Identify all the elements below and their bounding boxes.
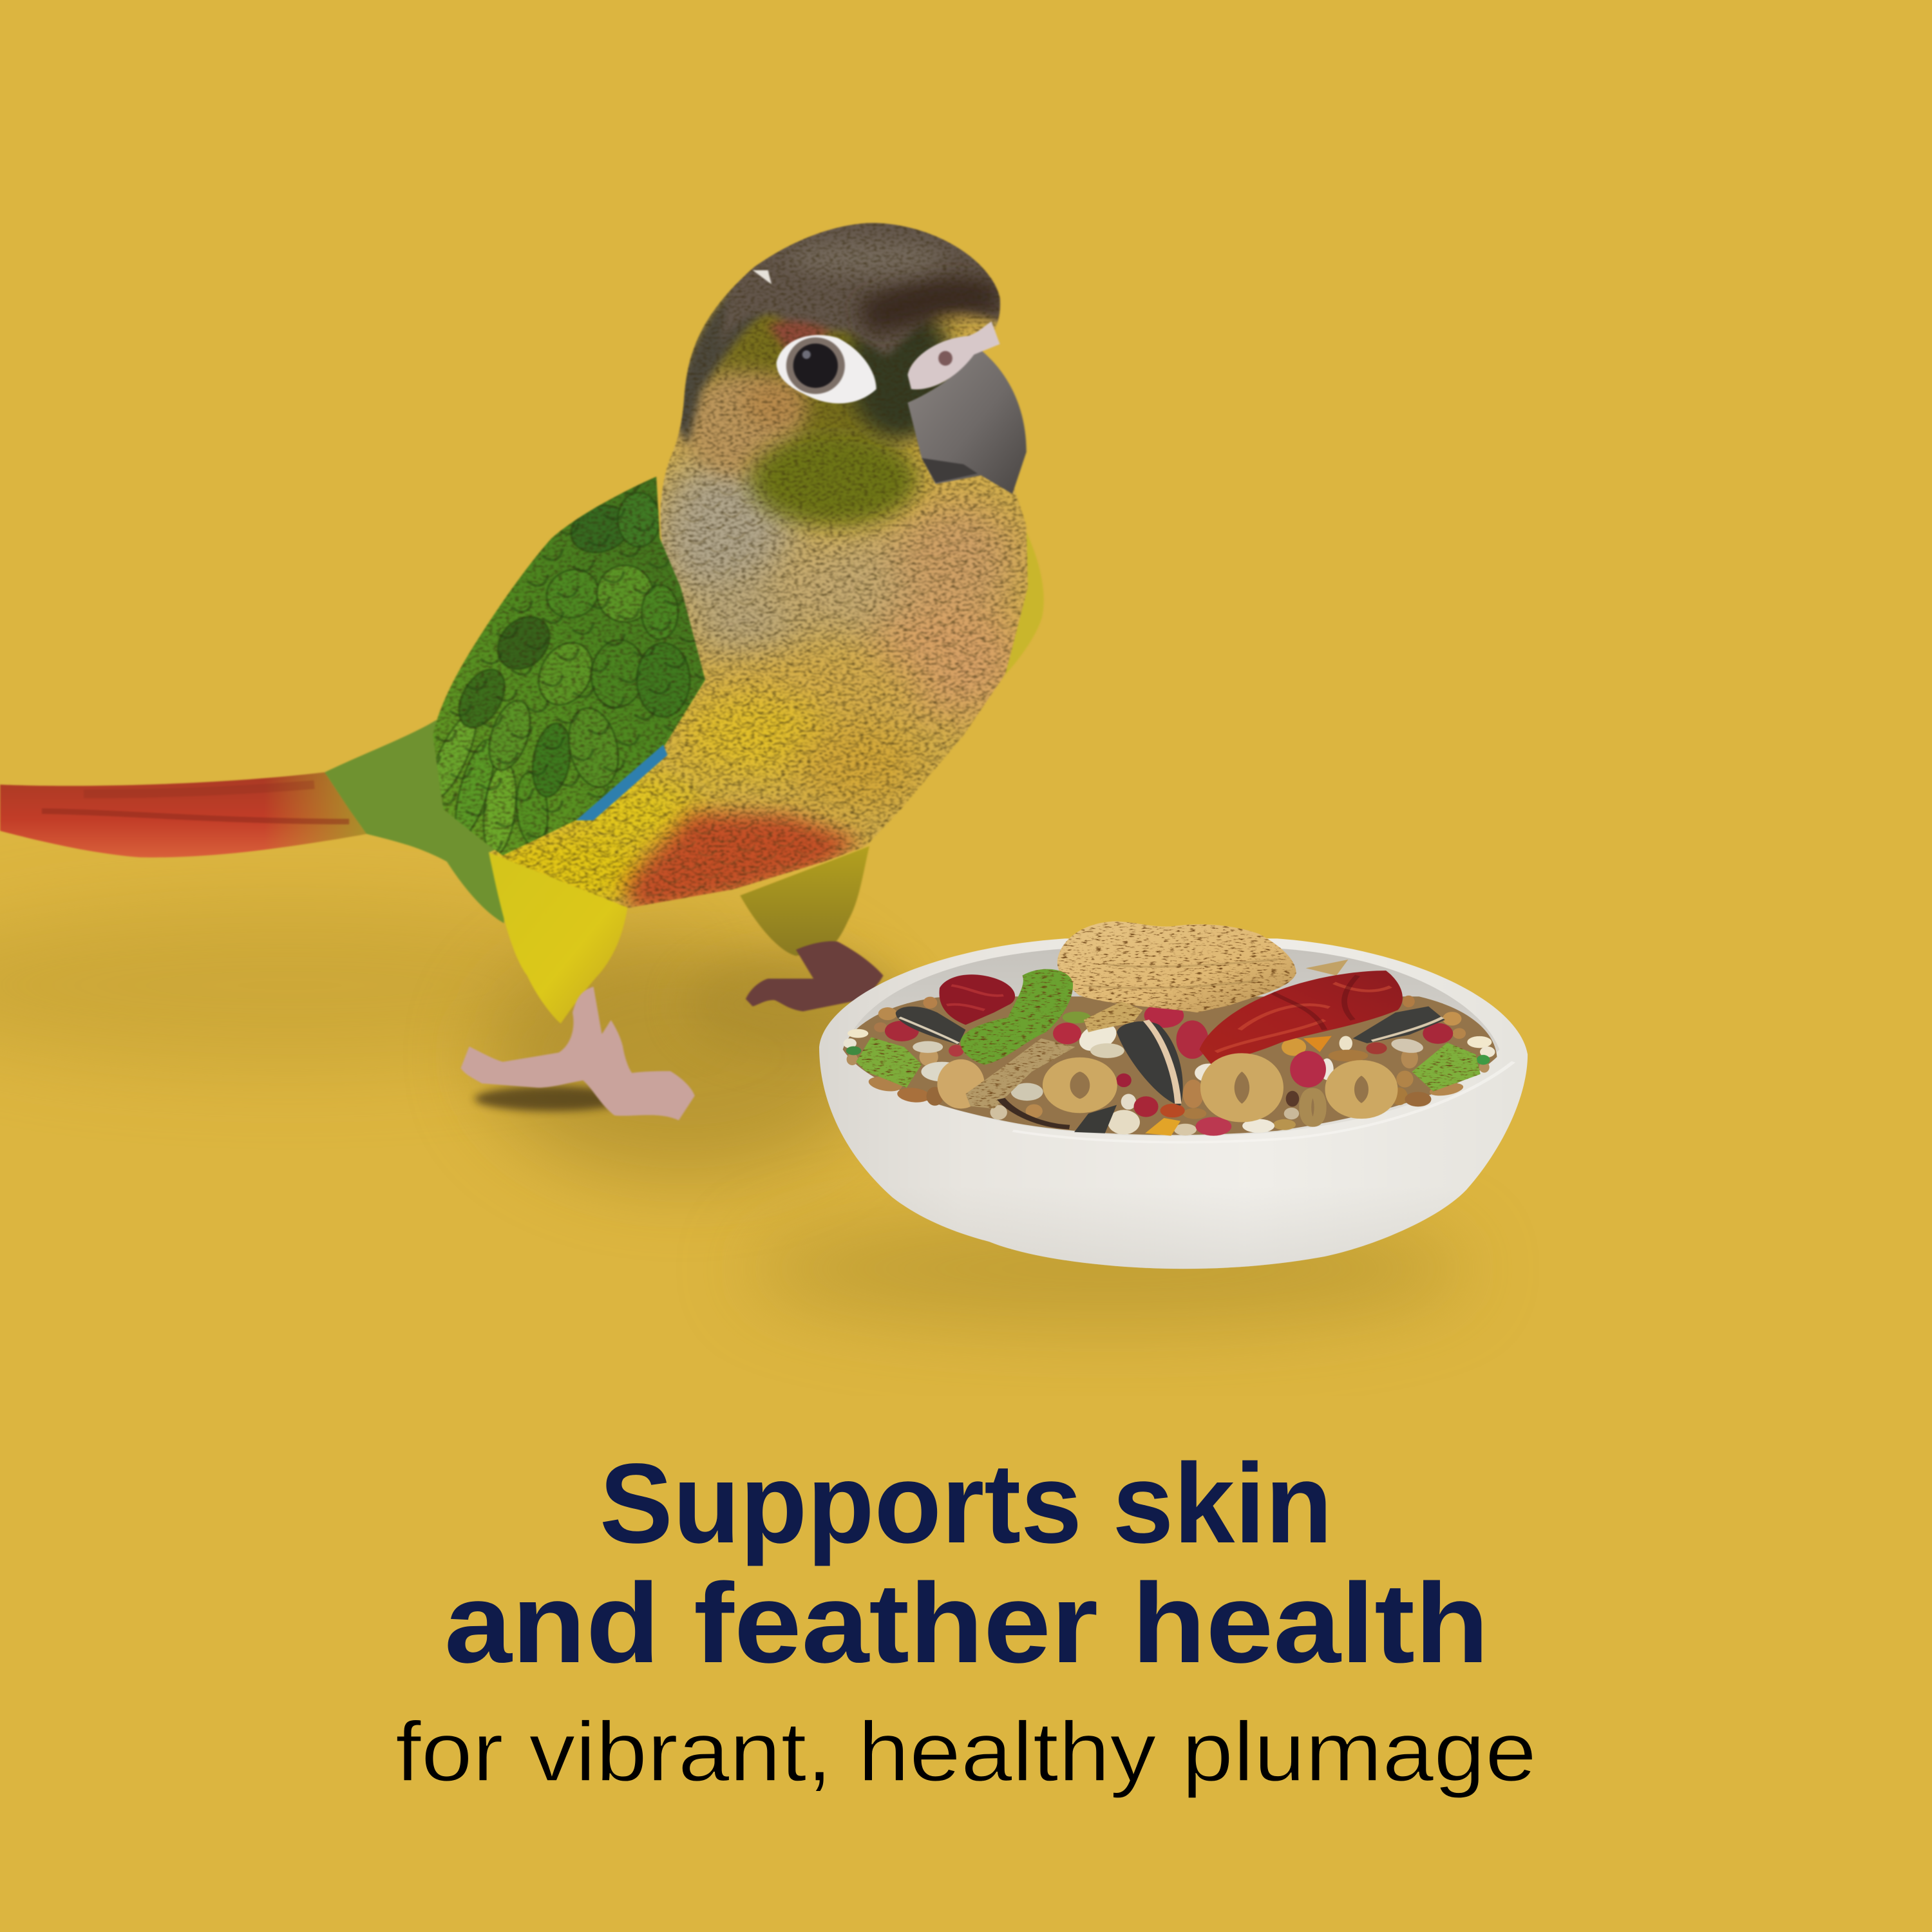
dark husk strip bbox=[1001, 1099, 1070, 1127]
green curled piece bbox=[960, 969, 1073, 1065]
cereal rings bbox=[1056, 1062, 1383, 1124]
chest plumage bbox=[454, 452, 1054, 933]
left sunflower seed bbox=[896, 1007, 965, 1045]
chili pepper bbox=[1199, 971, 1403, 1065]
orange fruit pieces bbox=[1145, 1036, 1332, 1136]
red berry pieces bbox=[885, 1003, 1453, 1136]
food mix base bbox=[843, 996, 1497, 1135]
bowl front highlight bbox=[1013, 1062, 1513, 1142]
dried cranberry bbox=[939, 974, 1015, 1025]
head white fleck bbox=[753, 270, 772, 285]
far foot bbox=[746, 942, 884, 1011]
parrot rump bbox=[325, 720, 504, 923]
peanut bbox=[1057, 922, 1296, 1012]
parrot beak bbox=[907, 321, 1027, 494]
pale seed husk behind chili bbox=[1305, 960, 1348, 976]
head plumage bbox=[670, 218, 1005, 526]
small seeds and pellets bbox=[843, 996, 1495, 1135]
oat bar bbox=[965, 1038, 1075, 1108]
far leg bbox=[740, 846, 869, 956]
wing blue stripe bbox=[576, 744, 667, 820]
bowl body bbox=[819, 938, 1528, 1269]
parrot eye bbox=[777, 335, 876, 403]
subheading: for vibrant, healthy plumage bbox=[395, 1704, 1537, 1799]
illustration: bowl of food bbox=[819, 922, 1528, 1269]
dark seed bottom bbox=[1074, 1105, 1117, 1133]
center sunflower seed bbox=[1117, 1020, 1183, 1106]
parrot tail bbox=[0, 772, 366, 857]
infographic canvas bbox=[0, 222, 1532, 1798]
wing feathers bbox=[420, 493, 690, 857]
right sunflower seed bbox=[1353, 1007, 1445, 1043]
near foot bbox=[461, 987, 695, 1121]
cereal chunk bbox=[1084, 1001, 1142, 1032]
illustration: parrot bbox=[0, 212, 1054, 1121]
near foot shadow bbox=[475, 1086, 629, 1111]
far wing edge bbox=[995, 532, 1044, 686]
parrot chest and head plumage bbox=[488, 222, 1028, 909]
ground shadows bbox=[0, 902, 1468, 1327]
heading line 1: Supports skin bbox=[600, 1441, 1332, 1567]
green bits bbox=[856, 1037, 1481, 1092]
near thigh bbox=[489, 853, 629, 1023]
heading bbox=[444, 1441, 1489, 1687]
heading line 2: and feather health bbox=[444, 1560, 1489, 1687]
parrot wing bbox=[433, 476, 706, 856]
bowl inner wall bbox=[845, 949, 1499, 1136]
